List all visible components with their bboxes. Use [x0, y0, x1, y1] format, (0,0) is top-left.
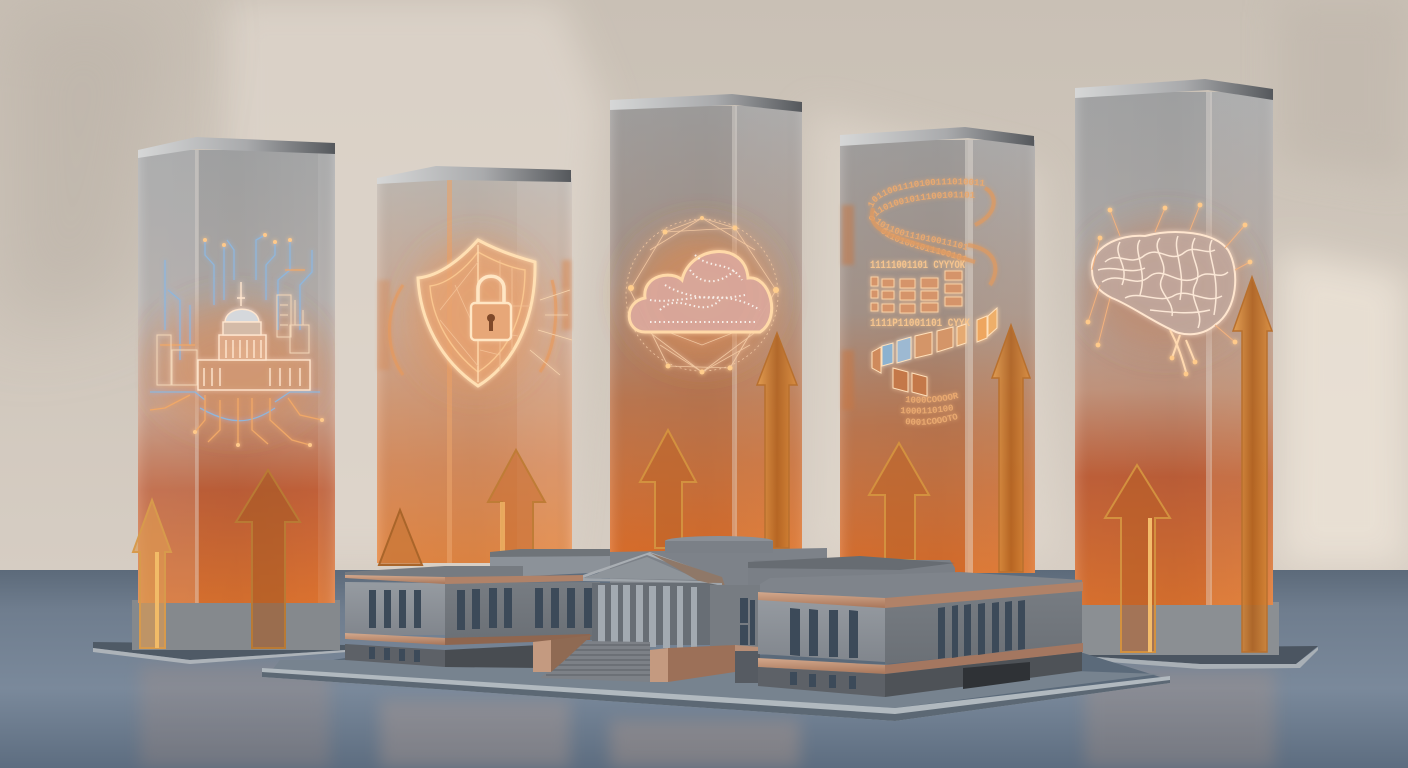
building plinth: [262, 652, 1170, 721]
tower 1 arrows: [133, 470, 300, 648]
tower 5 arrows: [1105, 277, 1272, 652]
icon: spiralling data ribbon: 11111001101 CYYYOK: [870, 260, 965, 272]
right wing: [758, 572, 1083, 697]
tower 1: government tech: [93, 137, 347, 664]
background wall: [0, 0, 1408, 572]
tower 2 glass body: [377, 166, 572, 563]
reflective floor: [0, 570, 1408, 768]
tower 5 glass body: [1075, 79, 1273, 605]
tower 4 arrows: [869, 325, 1030, 572]
icon: spiralling data ribbon: 1011001110100111010: [876, 218, 968, 251]
tower 2: security: [377, 166, 572, 565]
tower 5 base and plate: [1080, 602, 1318, 669]
icon: cloud and network sphere: [626, 216, 779, 374]
icon: spiralling data ribbon: 1111P11001101 CYYK: [870, 318, 970, 330]
icon: spiralling data ribbon: 01101001011100101: [881, 228, 966, 262]
tower 1 glass body: [138, 137, 335, 603]
tower 2 arrows: [379, 450, 545, 565]
rear blocks and dome drum: [490, 536, 955, 592]
tower 5: AI brain: [1075, 79, 1318, 669]
tower 1 base and plate: [93, 600, 347, 664]
entrance stairs with copper walls: [533, 635, 760, 683]
left wing: [345, 566, 600, 668]
icon: spiralling data ribbon: 1000110100: [900, 404, 954, 415]
tower 3 glass body: [610, 94, 802, 552]
icon: shield with padlock: [390, 240, 572, 386]
tower 3: cloud: [610, 94, 802, 552]
icon: spiralling data ribbon: 0001COOOTO: [904, 412, 958, 426]
central portico with columns and pediment: [583, 552, 760, 649]
central government building model: [262, 536, 1170, 721]
icon: glowing neural brain: [1086, 203, 1252, 376]
icon: spiralling data ribbon: 1000COOOOR: [906, 392, 959, 404]
tower 4: data: [840, 127, 1035, 573]
tower 3 arrows: [640, 333, 797, 548]
icon: capitol with circuit lines: [150, 233, 324, 447]
icon: spiralling data ribbon: [868, 177, 1000, 426]
tower 4 glass body: [840, 127, 1035, 573]
